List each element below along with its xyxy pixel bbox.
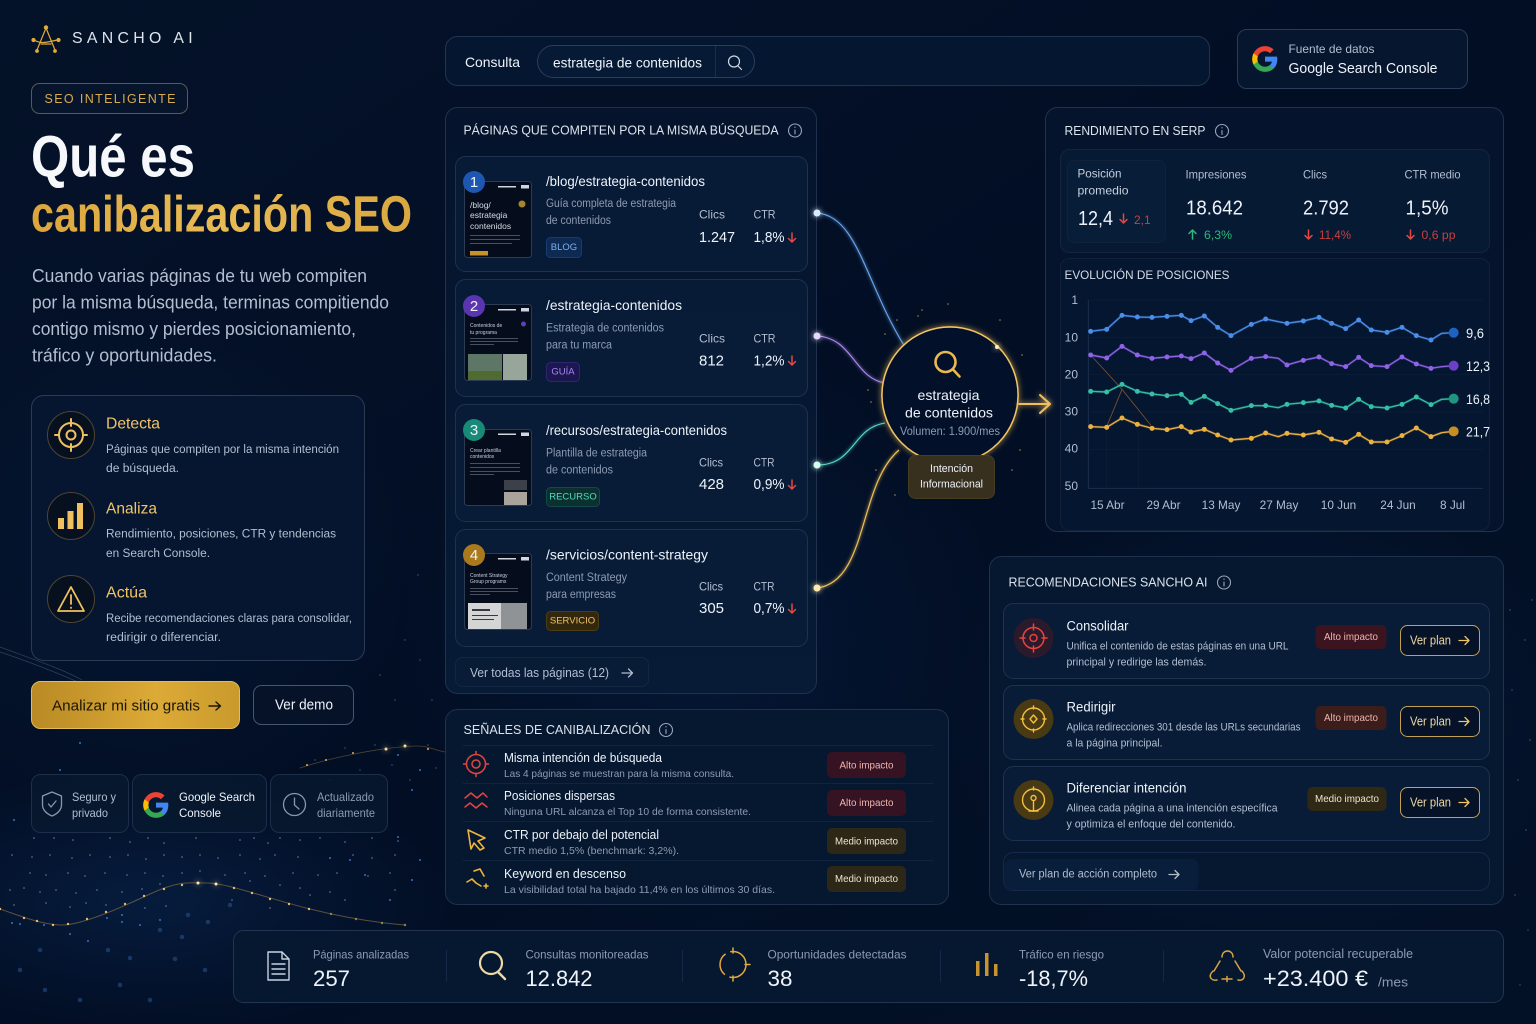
intro paragraph: Cuando varias páginas de tu web compiten	[32, 266, 367, 286]
item: detecta	[48, 412, 339, 475]
trust: google search console	[132, 774, 266, 832]
page card 2: CTR	[754, 332, 776, 346]
signal: keyword en descenso: La visibilidad total ha bajado 11,4% en los últimos 30 días.	[504, 884, 775, 896]
rank badge 1: 1	[470, 174, 478, 191]
stat: consultas monitoreadas: 12.842	[526, 966, 592, 991]
signal: keyword en descenso: Medio impacto	[835, 873, 898, 885]
x axis labels: 8 Jul	[1440, 498, 1465, 512]
item: detecta: Detecta	[106, 416, 160, 432]
panel: detecta, analiza, actúa	[32, 396, 364, 660]
rank badge 1	[463, 171, 485, 193]
chart: evolución de posiciones: EVOLUCIÓN DE POSICIONES	[1064, 267, 1230, 282]
tag servicio	[546, 612, 598, 630]
line: gold	[814, 450, 899, 592]
stat: consultas monitoreadas	[480, 948, 648, 991]
page card 2	[456, 280, 808, 396]
end labels: 9,6	[1466, 326, 1484, 341]
signal: misma intención: Misma intención de búsqueda	[504, 751, 662, 765]
button: ver demo: Ver demo	[275, 698, 333, 714]
item: analiza: en Search Console.	[106, 546, 210, 560]
KPI: posición promedio: promedio	[1078, 184, 1129, 198]
chart: evolución de posiciones	[1060, 258, 1490, 530]
badge	[1316, 625, 1386, 649]
page card 1	[456, 156, 808, 272]
rec: redirigir: a la página principal.	[1066, 738, 1162, 750]
link: ver plan de acción completo	[1004, 852, 1490, 890]
data source card	[1238, 30, 1468, 88]
item: detecta: de búsqueda.	[106, 461, 179, 475]
thumbnail 4: Content Strategy	[470, 573, 508, 579]
page card 1: Clics	[699, 208, 725, 222]
thumbnail 1	[464, 182, 532, 258]
item: analiza: Analiza	[106, 500, 157, 518]
page card 2: Estrategia de contenidos	[546, 322, 664, 334]
item: actúa: Actúa	[106, 584, 147, 602]
search bar	[446, 36, 1210, 86]
signal: CTR por debajo: Medio impacto	[835, 836, 898, 848]
query hub: de contenidos	[905, 404, 993, 420]
rank badge 4: 4	[470, 547, 478, 564]
stat: páginas analizadas	[268, 948, 409, 991]
rank badge 3: 3	[470, 422, 478, 439]
button: ver demo	[254, 686, 354, 724]
signal: misma intención	[464, 751, 906, 780]
button: Ver plan	[1410, 634, 1451, 648]
page card 3: /recursos/estrategia-contenidos	[546, 422, 727, 438]
y axis labels	[1065, 293, 1078, 493]
KPI: clics: 2.792	[1303, 198, 1349, 220]
thumbnail 1: /blog/	[470, 200, 491, 210]
title	[31, 124, 412, 242]
icon: search	[936, 352, 960, 376]
panel: rendimiento en SERP: RENDIMIENTO EN SERP	[1064, 124, 1206, 138]
button	[1400, 788, 1480, 818]
KPI: CTR medio: 1,5%	[1406, 198, 1449, 220]
thumbnail 4: Group programs	[470, 579, 507, 585]
title: canibalización SEO	[31, 186, 412, 242]
x axis labels: 24 Jun	[1380, 498, 1416, 512]
series: teal	[1091, 384, 1459, 410]
intro paragraph	[32, 266, 389, 366]
rank badge 4	[463, 544, 485, 566]
panel: páginas que compiten	[446, 108, 816, 694]
stat: valor potencial: +23.400 €	[1263, 966, 1368, 991]
page card 3	[456, 404, 808, 522]
page card 3: de contenidos	[546, 464, 613, 476]
thumbnail 2: Contenidos de	[470, 323, 502, 329]
stat: oportunidades detectadas: Oportunidades detectadas	[768, 948, 906, 962]
item: actúa	[48, 576, 352, 644]
brand logo	[32, 26, 197, 52]
badge: Medio impacto	[1315, 793, 1379, 805]
rec: diferenciar intención: Alinea cada página a una intención específica	[1066, 802, 1278, 814]
item: detecta: Páginas que compiten por la misma intención	[106, 442, 339, 456]
series: blue	[1091, 315, 1459, 340]
page card 1: /blog/estrategia-contenidos	[546, 173, 705, 189]
thumbnail 3	[464, 430, 532, 506]
end labels: 16,8	[1466, 392, 1490, 407]
KPI: CTR medio	[1404, 168, 1461, 242]
x axis labels	[1090, 498, 1465, 512]
KPI: impresiones: 18.642	[1186, 198, 1243, 220]
item: analiza: Rendimiento, posiciones, CTR y tendencias	[106, 526, 336, 540]
KPI: posición promedio: 2,1	[1134, 213, 1151, 227]
signal: posiciones dispersas: Posiciones dispersas	[504, 789, 615, 803]
tag recurso	[546, 488, 600, 506]
query hub: estrategia	[918, 387, 980, 403]
page card 4: CTR	[754, 580, 775, 594]
signal: posiciones dispersas	[465, 789, 906, 818]
KPI: clics: 11,4%	[1319, 228, 1351, 242]
thumbnail 3: contenidos	[470, 454, 495, 460]
trust: actualizado diariamente	[270, 774, 388, 832]
page card 1: CTR	[754, 208, 776, 222]
query hub	[868, 304, 1022, 498]
panel: recomendaciones	[990, 556, 1504, 904]
tag servicio: SERVICIO	[550, 616, 595, 626]
badge	[1316, 706, 1386, 730]
trust: google search console: Google Search	[179, 790, 255, 804]
rec: redirigir: Aplica redirecciones 301 desde las URLs secundarias	[1066, 722, 1301, 734]
line: teal	[814, 423, 885, 468]
rec: consolidar: principal y redirige las demás.	[1066, 656, 1206, 668]
link: ver todas las páginas: Ver todas las páginas (12)	[470, 666, 609, 680]
page card 4	[456, 530, 808, 646]
title: Qué es	[31, 124, 195, 190]
rec: diferenciar intención: y optimiza el enfoque del contenido.	[1066, 818, 1236, 830]
page card 4: Clics	[699, 580, 723, 594]
series: purple	[1091, 346, 1459, 371]
query hub: Volumen: 1.900/mes	[900, 426, 1000, 438]
signal: CTR por debajo	[468, 828, 906, 857]
signal: misma intención: Alto impacto	[840, 760, 894, 772]
button: Ver plan	[1410, 714, 1451, 728]
page card 3: 0,9%	[754, 476, 784, 493]
stat: valor potencial	[1210, 947, 1413, 991]
item: actúa: redirigir o diferenciar.	[106, 630, 221, 644]
panel: rendimiento en SERP	[1046, 108, 1504, 532]
y axis labels: 30	[1065, 404, 1078, 418]
rec: redirigir: Redirigir	[1066, 700, 1116, 714]
KPI: posición promedio: Posición	[1078, 166, 1122, 180]
search bar: Consulta	[465, 54, 520, 70]
signal: CTR por debajo: CTR por debajo del potencial	[504, 828, 659, 842]
badge: SEO inteligente: SEO INTELIGENTE	[44, 92, 176, 106]
connector lines from pages to query hub	[814, 210, 905, 592]
link: ver plan de acción completo: Ver plan de acción completo	[1019, 868, 1157, 880]
tag blog	[546, 238, 582, 258]
x axis labels: 27 May	[1260, 498, 1298, 512]
y axis labels: 1	[1071, 293, 1078, 307]
button: Ver plan	[1410, 796, 1451, 810]
page card 3: Clics	[699, 456, 723, 470]
stat: tráfico en riesgo: -18,7%	[1019, 966, 1088, 991]
panel: señales de canibalización	[446, 710, 948, 904]
KPI: clics	[1303, 168, 1351, 242]
KPI: CTR medio: CTR medio	[1404, 168, 1461, 182]
page card 4: /servicios/content-strategy	[546, 546, 708, 562]
tag blog: BLOG	[551, 242, 577, 253]
stat: valor potencial: Valor potencial recuperable	[1263, 947, 1413, 961]
query pill: estrategia de contenidos	[553, 54, 702, 70]
stat: valor potencial: /mes	[1378, 974, 1409, 990]
page card 4: Content Strategy	[546, 572, 627, 584]
stat: oportunidades detectadas	[720, 948, 906, 991]
rec: diferenciar intención: Diferenciar intención	[1066, 780, 1186, 796]
page card 2: para tu marca	[546, 340, 613, 352]
y axis labels: 50	[1065, 479, 1078, 493]
item: actúa: Recibe recomendaciones claras para consolidar,	[106, 611, 352, 625]
KPI strip	[1060, 150, 1490, 252]
y axis labels: 20	[1065, 368, 1078, 382]
signal: keyword en descenso: Keyword en descenso	[504, 867, 626, 881]
stats bar	[234, 930, 1504, 1002]
page card 1: 1,8%	[754, 229, 784, 246]
page card 1: de contenidos	[546, 215, 611, 227]
page card 1: 1.247	[699, 229, 735, 246]
x axis labels: 15 Abr	[1090, 498, 1125, 512]
page card 3: CTR	[754, 456, 775, 470]
panel: recomendaciones: RECOMENDACIONES SANCHO AI	[1008, 576, 1208, 590]
signal: posiciones dispersas: Alto impacto	[840, 797, 894, 809]
end labels: 21,7	[1466, 424, 1490, 440]
trust: google search console: Console	[179, 806, 221, 820]
rec: consolidar: Unifica el contenido de estas páginas en una URL	[1066, 640, 1288, 652]
rank badge 3	[463, 419, 485, 441]
stat: páginas analizadas: 257	[313, 966, 350, 991]
signal: keyword en descenso	[467, 866, 906, 896]
data source card: Google Search Console	[1288, 61, 1438, 77]
stat: tráfico en riesgo: Tráfico en riesgo	[1019, 948, 1104, 962]
stat: tráfico en riesgo	[976, 948, 1104, 991]
intro paragraph: contigo mismo y pierdes posicionamiento,	[32, 319, 356, 339]
line: blue	[814, 210, 905, 347]
item: analiza	[48, 492, 336, 560]
trust: actualizado diariamente: Actualizado	[317, 790, 374, 804]
page card 3: 428	[699, 476, 724, 493]
thumbnail 1: estrategia	[470, 210, 508, 220]
trust: actualizado diariamente: diariamente	[317, 806, 375, 820]
thumbnail 3: Crear plantilla	[470, 448, 501, 454]
end labels: 12,3	[1466, 359, 1490, 374]
x axis labels: 13 May	[1202, 498, 1240, 512]
page card 4: para empresas	[546, 589, 616, 601]
trust: seguro y privado: Seguro y	[72, 790, 116, 804]
tag: intención informacional: Intención	[930, 463, 973, 475]
button: analizar: Analizar mi sitio gratis	[52, 698, 200, 714]
thumbnail 2	[464, 304, 532, 380]
link: ver todas las páginas	[456, 658, 648, 686]
KPI: CTR medio: 0,6 pp	[1422, 228, 1456, 242]
data source card: Fuente de datos	[1288, 42, 1374, 56]
rank badge 2: 2	[470, 298, 478, 315]
tag: intención informacional: Informacional	[920, 478, 983, 490]
KPI: clics: Clics	[1303, 168, 1327, 182]
thumbnail 4	[464, 554, 532, 630]
rec: diferenciar intención	[1004, 766, 1490, 840]
stat: páginas analizadas: Páginas analizadas	[313, 948, 409, 962]
icon: sancho logo	[32, 26, 60, 52]
button	[1400, 706, 1480, 736]
badge: SEO inteligente	[32, 84, 188, 114]
trust: seguro y privado: privado	[72, 806, 108, 820]
y axis labels: 40	[1065, 442, 1078, 456]
x axis labels: 10 Jun	[1321, 498, 1356, 512]
panel: señales de canibalización: SEÑALES DE CANIBALIZACIÓN	[464, 722, 650, 737]
page card 2: Clics	[699, 332, 725, 346]
signal: misma intención: Las 4 páginas se muestran para la misma consulta.	[504, 768, 734, 780]
page card 2: 812	[699, 352, 724, 370]
thumbnail 2: tu programa	[470, 330, 497, 336]
page card 4: 305	[699, 600, 724, 617]
thumbnail 1: contenidos	[470, 221, 511, 231]
line: purple	[814, 332, 885, 383]
tag guía	[546, 362, 580, 382]
stat: consultas monitoreadas: Consultas monitoreadas	[526, 948, 648, 962]
KPI: posición promedio	[1068, 160, 1166, 242]
button: analizar	[32, 682, 240, 728]
tag: intención informacional	[908, 456, 994, 498]
rec: consolidar: Consolidar	[1066, 618, 1129, 634]
page card 1: Guía completa de estrategia	[546, 198, 677, 210]
KPI: impresiones	[1186, 168, 1246, 242]
page card 4: 0,7%	[754, 600, 784, 617]
trust: seguro y privado	[32, 774, 128, 832]
tag guía: GUÍA	[551, 366, 575, 378]
intro paragraph: por la misma búsqueda, terminas compitiendo	[32, 292, 389, 312]
stat: oportunidades detectadas: 38	[768, 966, 792, 991]
KPI: posición promedio: 12,4	[1078, 208, 1113, 230]
rank badge 2	[463, 295, 485, 317]
x axis labels: 29 Abr	[1146, 498, 1181, 512]
button	[1400, 626, 1480, 656]
tag recurso: RECURSO	[549, 492, 597, 502]
KPI: impresiones: Impresiones	[1186, 168, 1246, 182]
panel: páginas que compiten: PÁGINAS QUE COMPITEN POR LA MISMA BÚSQUEDA	[464, 122, 779, 138]
page card 3: Plantilla de estrategia	[546, 448, 648, 460]
badge: Alto impacto	[1324, 631, 1378, 643]
query pill	[538, 46, 754, 78]
end labels	[1466, 326, 1490, 440]
intro paragraph: tráfico y oportunidades.	[32, 346, 217, 366]
plot	[1088, 300, 1483, 488]
arrow to SERP panel	[1019, 395, 1050, 413]
page card 2: /estrategia-contenidos	[546, 297, 682, 313]
signal: CTR por debajo: CTR medio 1,5% (benchmark: 3,2%).	[504, 845, 679, 857]
badge	[1308, 787, 1386, 811]
rec: consolidar	[1004, 604, 1490, 678]
KPI: impresiones: 6,3%	[1204, 228, 1232, 242]
badge: Alto impacto	[1324, 712, 1378, 724]
brand logo: SANCHO AI	[72, 30, 197, 47]
series: gold	[1091, 418, 1459, 442]
signal: posiciones dispersas: Ninguna URL alcanza el Top 10 de forma consistente.	[504, 806, 751, 818]
rec: redirigir	[1004, 686, 1490, 760]
page card 2: 1,2%	[754, 352, 784, 370]
y axis labels: 10	[1065, 330, 1078, 344]
